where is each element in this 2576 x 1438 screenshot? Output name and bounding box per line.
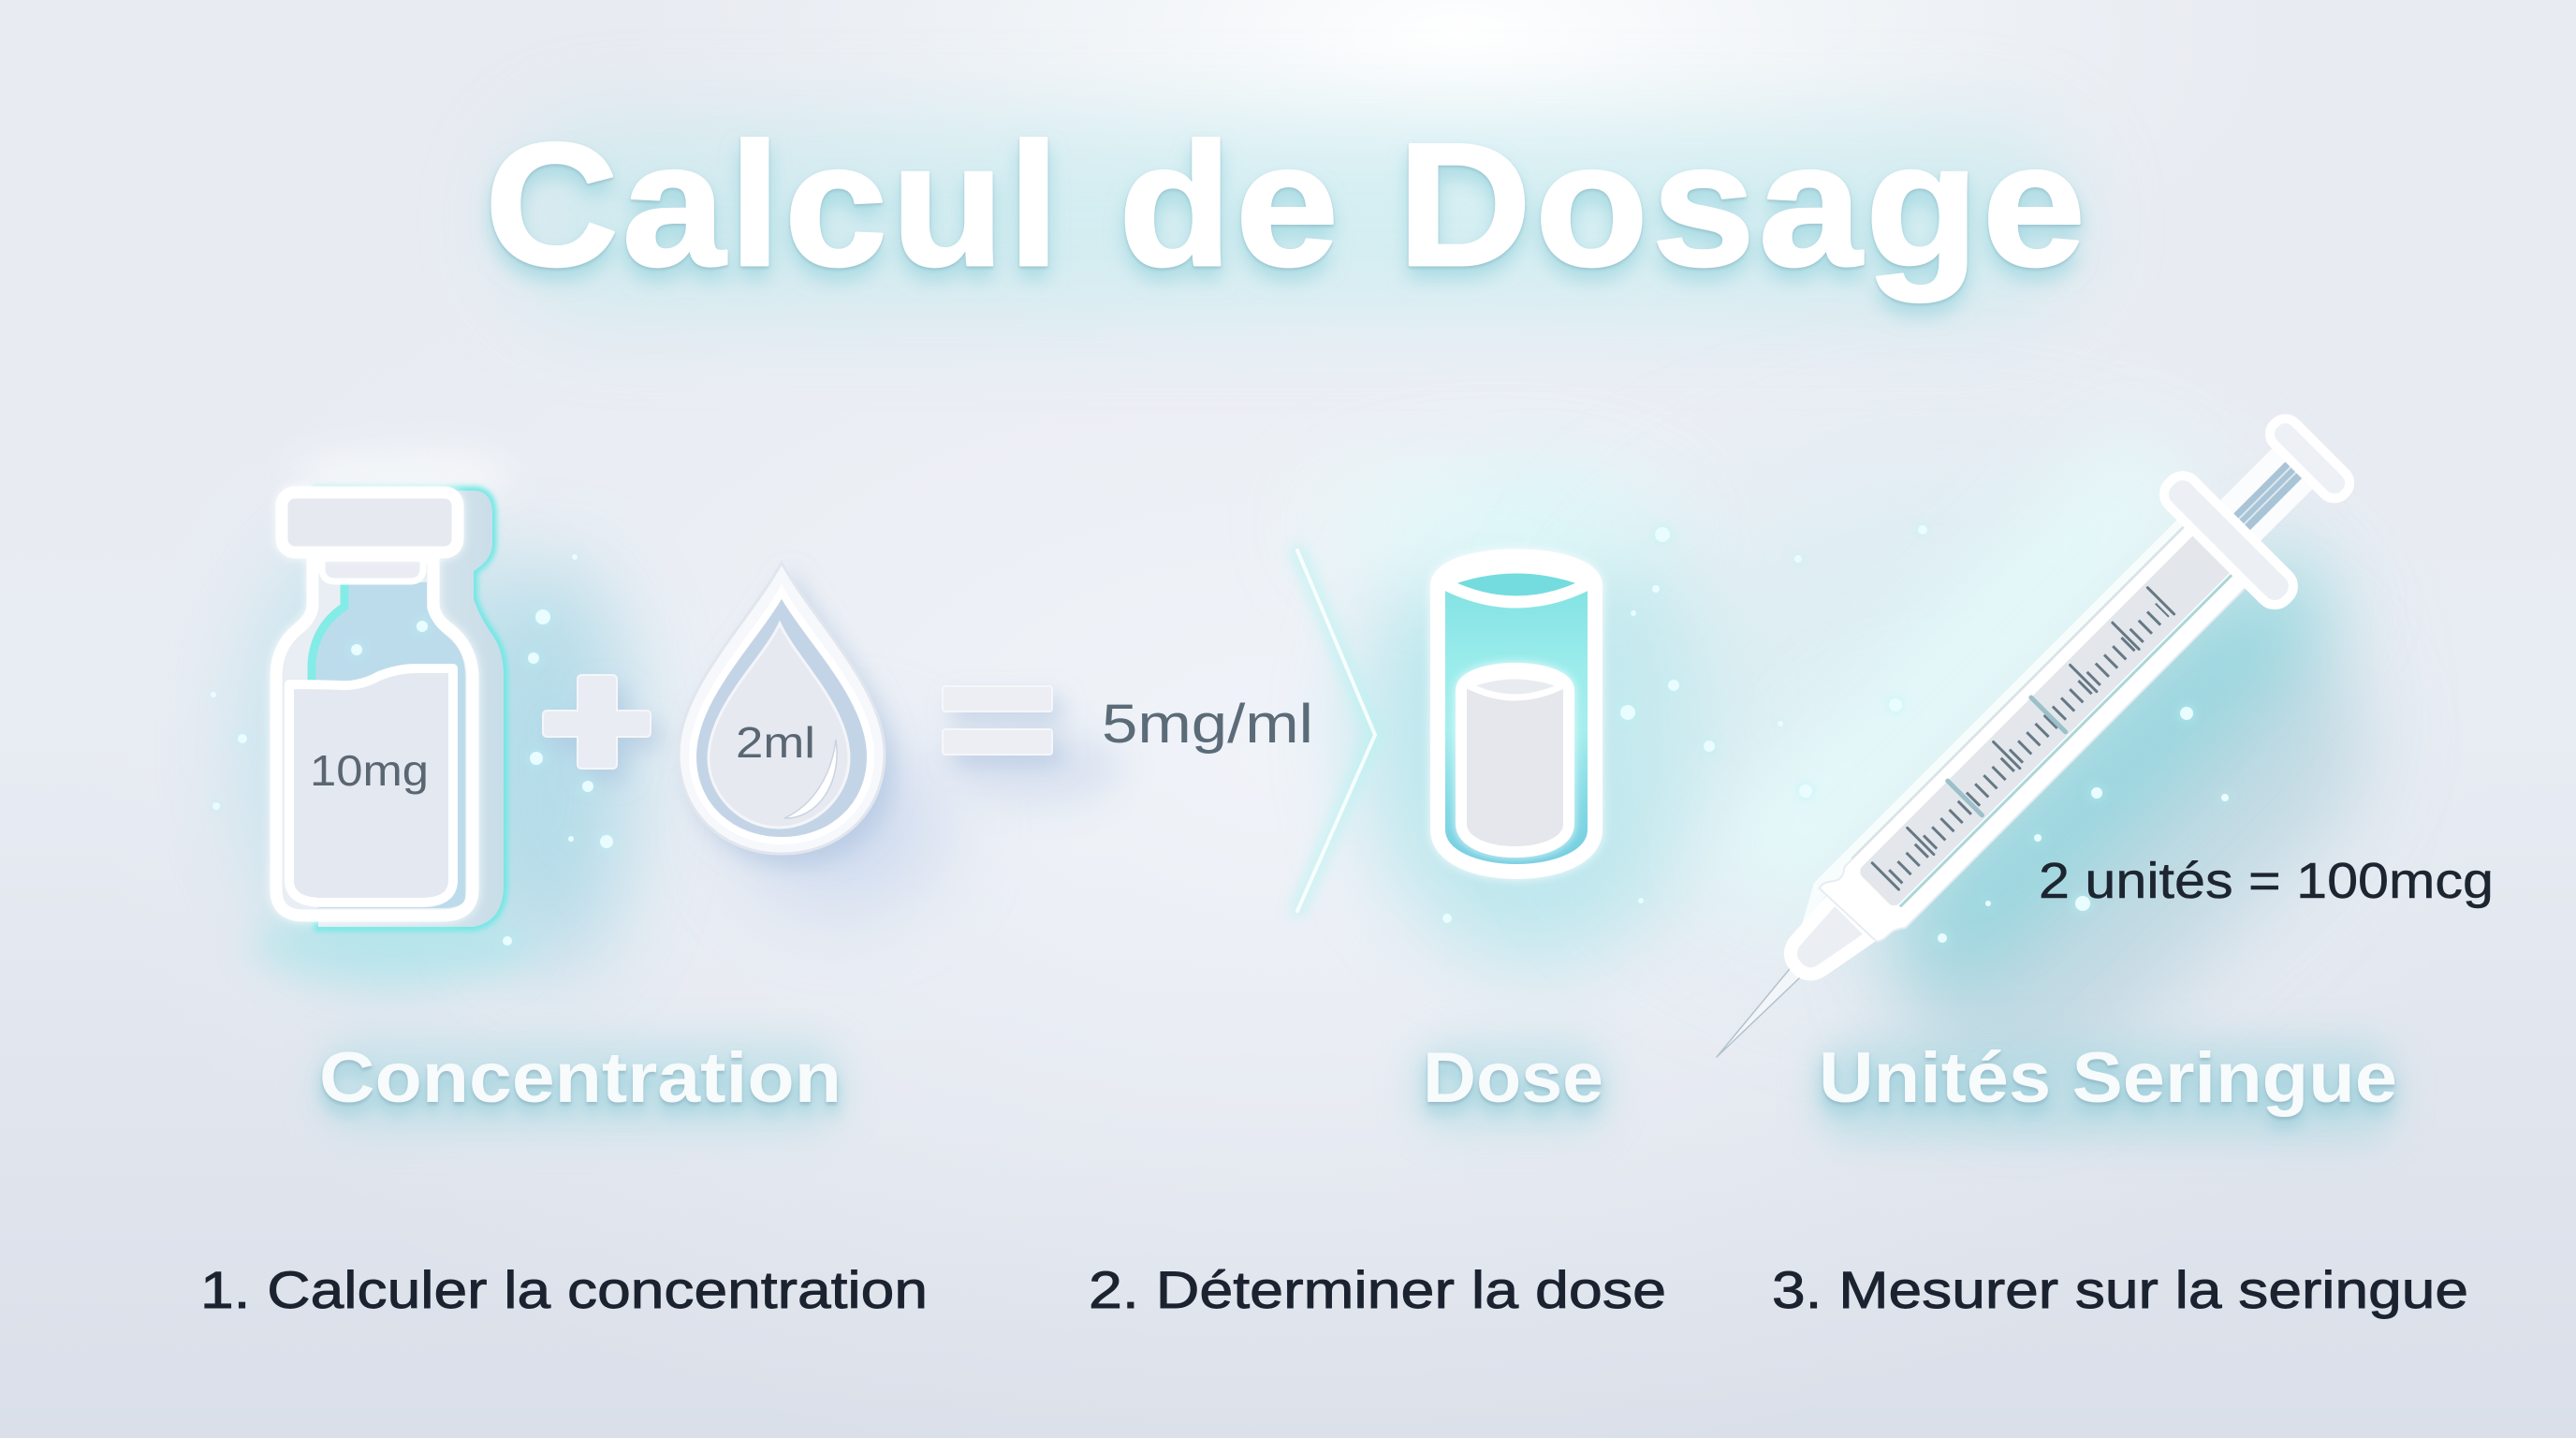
icon: equals <box>943 686 1052 755</box>
barrel <box>1819 507 2262 951</box>
label: Dose: Dose <box>1423 1038 1603 1118</box>
drop middle band <box>693 592 871 841</box>
icon: dose tube <box>1438 556 1595 872</box>
vial liquid <box>289 668 453 902</box>
icon: syringe <box>1656 389 2379 1113</box>
label: Unités Seringue: Unités Seringue <box>1819 1038 2397 1118</box>
tube rim <box>1442 567 1591 602</box>
graduation ticks <box>1869 584 2179 894</box>
vial body outline <box>276 558 473 916</box>
needle <box>1709 964 1804 1059</box>
step 1: 1. Calculer la concentration <box>200 1260 928 1319</box>
vial extruded back with cyan edge <box>313 491 504 927</box>
syringe glow, aligned to the syringe axis <box>1697 402 2452 1156</box>
icon: vial <box>276 491 504 927</box>
drop highlight <box>784 740 837 818</box>
vial amount: 10mg <box>310 746 429 795</box>
vial cap <box>282 492 458 552</box>
icon: plus <box>543 675 651 769</box>
step 3: 3. Mesurer sur la seringue <box>1772 1260 2468 1319</box>
drop outer shell <box>679 563 885 854</box>
drop amount: 2ml <box>736 718 815 767</box>
tube inner cylinder <box>1461 668 1569 852</box>
concentration result: 5mg/ml <box>1102 694 1313 755</box>
plunger top flange <box>2264 413 2355 505</box>
label: Concentration: Concentration <box>319 1038 842 1118</box>
hub <box>1780 897 1873 990</box>
tube body <box>1438 556 1595 872</box>
sparkle particles <box>211 525 2229 946</box>
arrow: chevron <box>1297 550 1375 911</box>
plunger rod <box>2210 436 2324 551</box>
vial inner blue fill with cyan neck edge <box>312 582 465 908</box>
syringe upper extruded edge <box>1778 509 2208 939</box>
step 2: 2. Déterminer la dose <box>1089 1260 1666 1319</box>
title: Calcul de Dosage <box>485 107 2089 302</box>
tube inner cylinder top <box>1468 676 1563 697</box>
drop inner <box>709 624 849 828</box>
icon: drop <box>679 563 885 854</box>
vial neck ring <box>322 562 423 581</box>
barrel flange <box>2158 469 2300 611</box>
syringe conversion note: 2 unités = 100mcg <box>2039 853 2494 909</box>
